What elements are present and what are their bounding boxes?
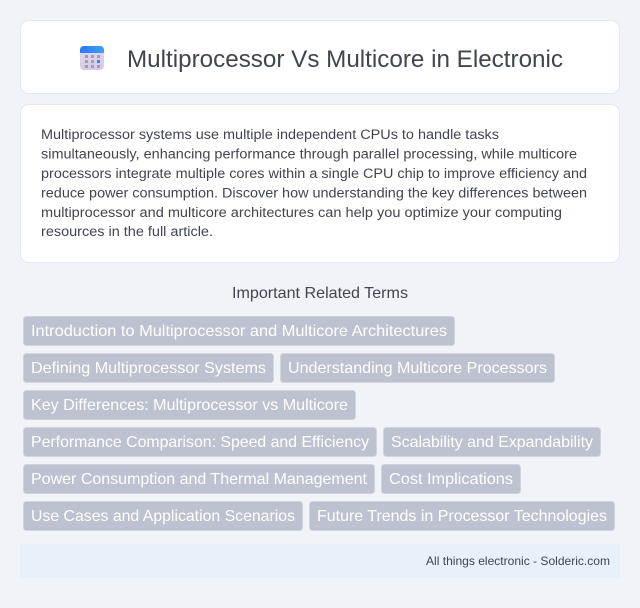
heading: related terms: Important Related Terms [232,285,408,302]
panel: header [20,20,620,94]
footer credit: All things electronic - Solderic.com [426,554,610,568]
tag: future trends [310,502,614,530]
text block: description: processors integrate multiple cores within a single CPU chip to improve efficiency and [41,166,587,182]
tag: use cases [24,502,302,530]
tag: introduction: Introduction to Multiprocessor and Multicore Architectures [31,323,447,340]
tag: defining: Defining Multiprocessor Systems [31,360,266,377]
icon: calendar grid [80,46,104,70]
tag: key differences [24,390,356,420]
tag: introduction [24,316,454,346]
tag: scalability [384,428,600,456]
tag: power: Power Consumption and Thermal Management [31,471,368,488]
tag: scalability: Scalability and Expandability [391,434,593,451]
tag: cost [382,464,520,494]
tag: cost: Cost Implications [389,471,513,488]
text block: description: resources in the full article. [41,224,213,240]
text block: description [41,127,587,240]
text block: description: reduce power consumption. Discover how understanding the key differences between [41,186,587,202]
panel: description [20,104,620,262]
tag: performance: Performance Comparison: Speed and Efficiency [31,434,369,451]
tag: key differences: Key Differences: Multiprocessor vs Multicore [31,397,348,414]
tag: understanding [280,354,554,382]
tag: performance [24,428,376,456]
tag: defining [24,354,274,382]
footer [20,544,620,578]
text block: description: Multiprocessor systems use multiple independent CPUs to handle tasks [41,127,499,143]
tag list [24,316,614,530]
tag: future trends: Future Trends in Processor Technologies [317,508,607,525]
text block: description: simultaneously, enhancing performance through parallel processing, while multicore [41,146,577,162]
tag: understanding: Understanding Multicore Processors [288,360,547,377]
title: Multiprocessor Vs Multicore in Electronic [127,46,563,73]
tag: use cases: Use Cases and Application Scenarios [31,508,295,525]
text block: description: multiprocessor and multicore architectures can help you optimize your computing [41,205,562,221]
tag: power [24,464,374,494]
